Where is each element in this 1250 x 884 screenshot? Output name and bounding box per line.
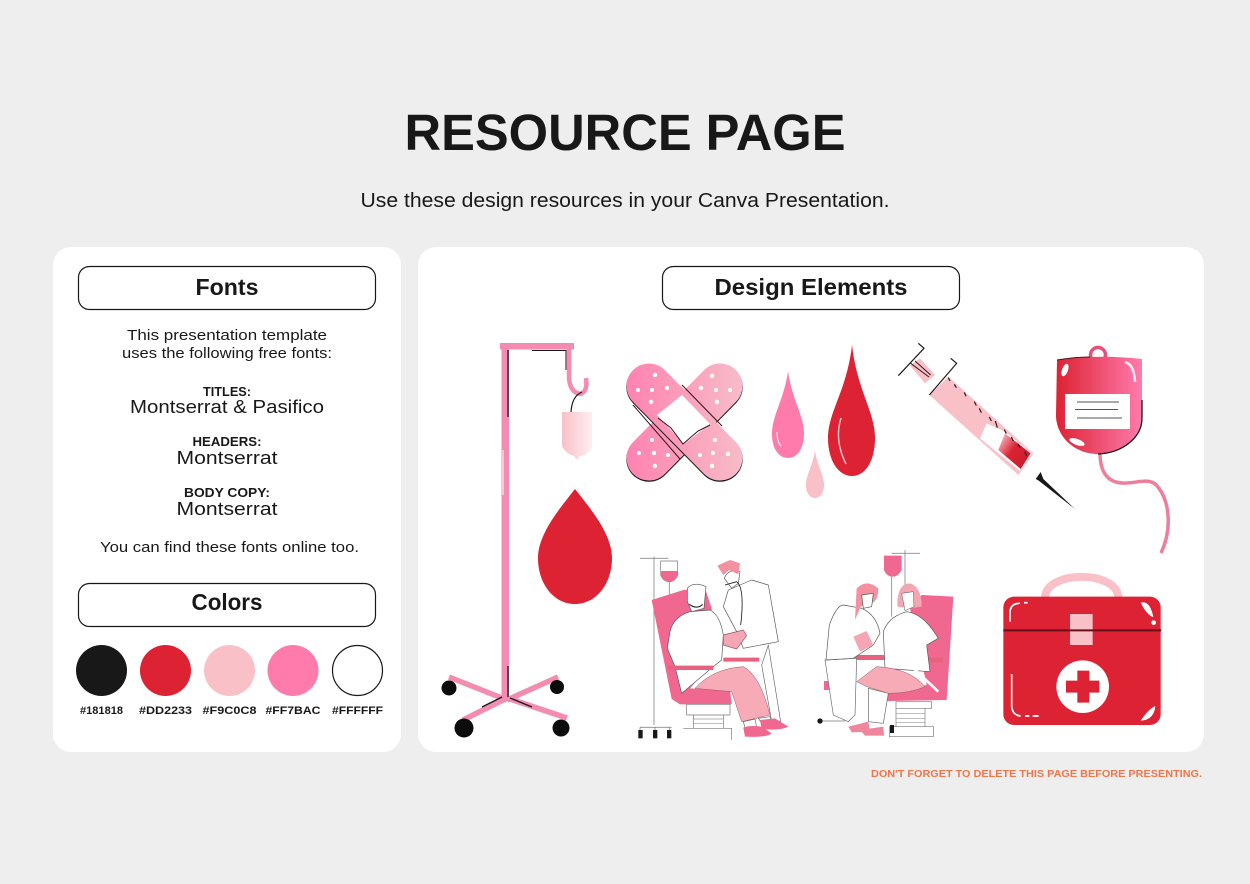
subtitle: Use these design resources in your Canva Presentation.	[360, 190, 890, 212]
icon: blood drops	[772, 345, 875, 498]
text block: headers font	[176, 434, 278, 468]
swatch: F9C0C8: #F9C0C8	[202, 705, 256, 717]
icon: IV stand	[442, 343, 592, 738]
swatch: 181818	[76, 645, 127, 717]
text block: body copy font: Montserrat	[176, 498, 278, 519]
patient	[667, 584, 788, 737]
heading: design elements: Design Elements	[714, 274, 908, 300]
text block: font intro: This presentation template	[127, 327, 327, 344]
color swatches	[76, 645, 383, 717]
icon: first aid kit	[1003, 577, 1161, 725]
text block: headers font: Montserrat	[176, 447, 278, 468]
swatch: DD2233: #DD2233	[139, 705, 192, 717]
heading: design elements	[662, 266, 960, 310]
panel: design elements	[418, 247, 1204, 752]
text block: font intro	[122, 327, 332, 362]
text block: titles font: TITLES:	[203, 384, 251, 399]
icon: blood bag	[1056, 348, 1168, 553]
icon: large blood drop	[538, 489, 612, 604]
text block: font intro: uses the following free fonts:	[122, 345, 332, 362]
patient	[848, 583, 938, 736]
text block: headers font: HEADERS:	[192, 434, 262, 449]
swatch: 181818: #181818	[80, 705, 123, 717]
heading: fonts: Fonts	[196, 274, 258, 300]
heading: colors: Colors	[192, 589, 262, 615]
panel: fonts and colors	[53, 247, 401, 752]
swatch: FF7BAC	[266, 645, 321, 717]
swatch: DD2233	[139, 645, 192, 717]
heading: colors	[78, 584, 376, 626]
heading: fonts	[78, 266, 376, 310]
swatch: FFFFFF: #FFFFFF	[332, 705, 383, 717]
illustration: patient with doctor	[638, 557, 788, 740]
text block: body copy font	[176, 485, 278, 519]
text block: body copy font: BODY COPY:	[184, 485, 270, 500]
swatch: F9C0C8	[202, 645, 256, 717]
chair	[652, 588, 732, 740]
IV drip stand	[638, 557, 678, 738]
text block: font note: You can find these fonts online too.	[100, 539, 359, 556]
title: RESOURCE PAGE	[404, 104, 846, 161]
icon: crossed bandages	[633, 373, 732, 468]
nurse	[817, 583, 880, 724]
text block: titles font: Montserrat & Pasifico	[130, 396, 324, 417]
text block: titles font	[130, 384, 324, 417]
footer note: DON'T FORGET TO DELETE THIS PAGE BEFORE PRESENTING.	[871, 769, 1202, 780]
illustration: patient with nurse	[817, 550, 953, 737]
swatch: FF7BAC: #FF7BAC	[266, 705, 321, 717]
swatch: FFFFFF	[332, 646, 383, 717]
IV drip stand	[884, 550, 920, 617]
icon: syringe	[898, 343, 1075, 509]
doctor	[717, 560, 781, 722]
chair	[855, 595, 953, 737]
